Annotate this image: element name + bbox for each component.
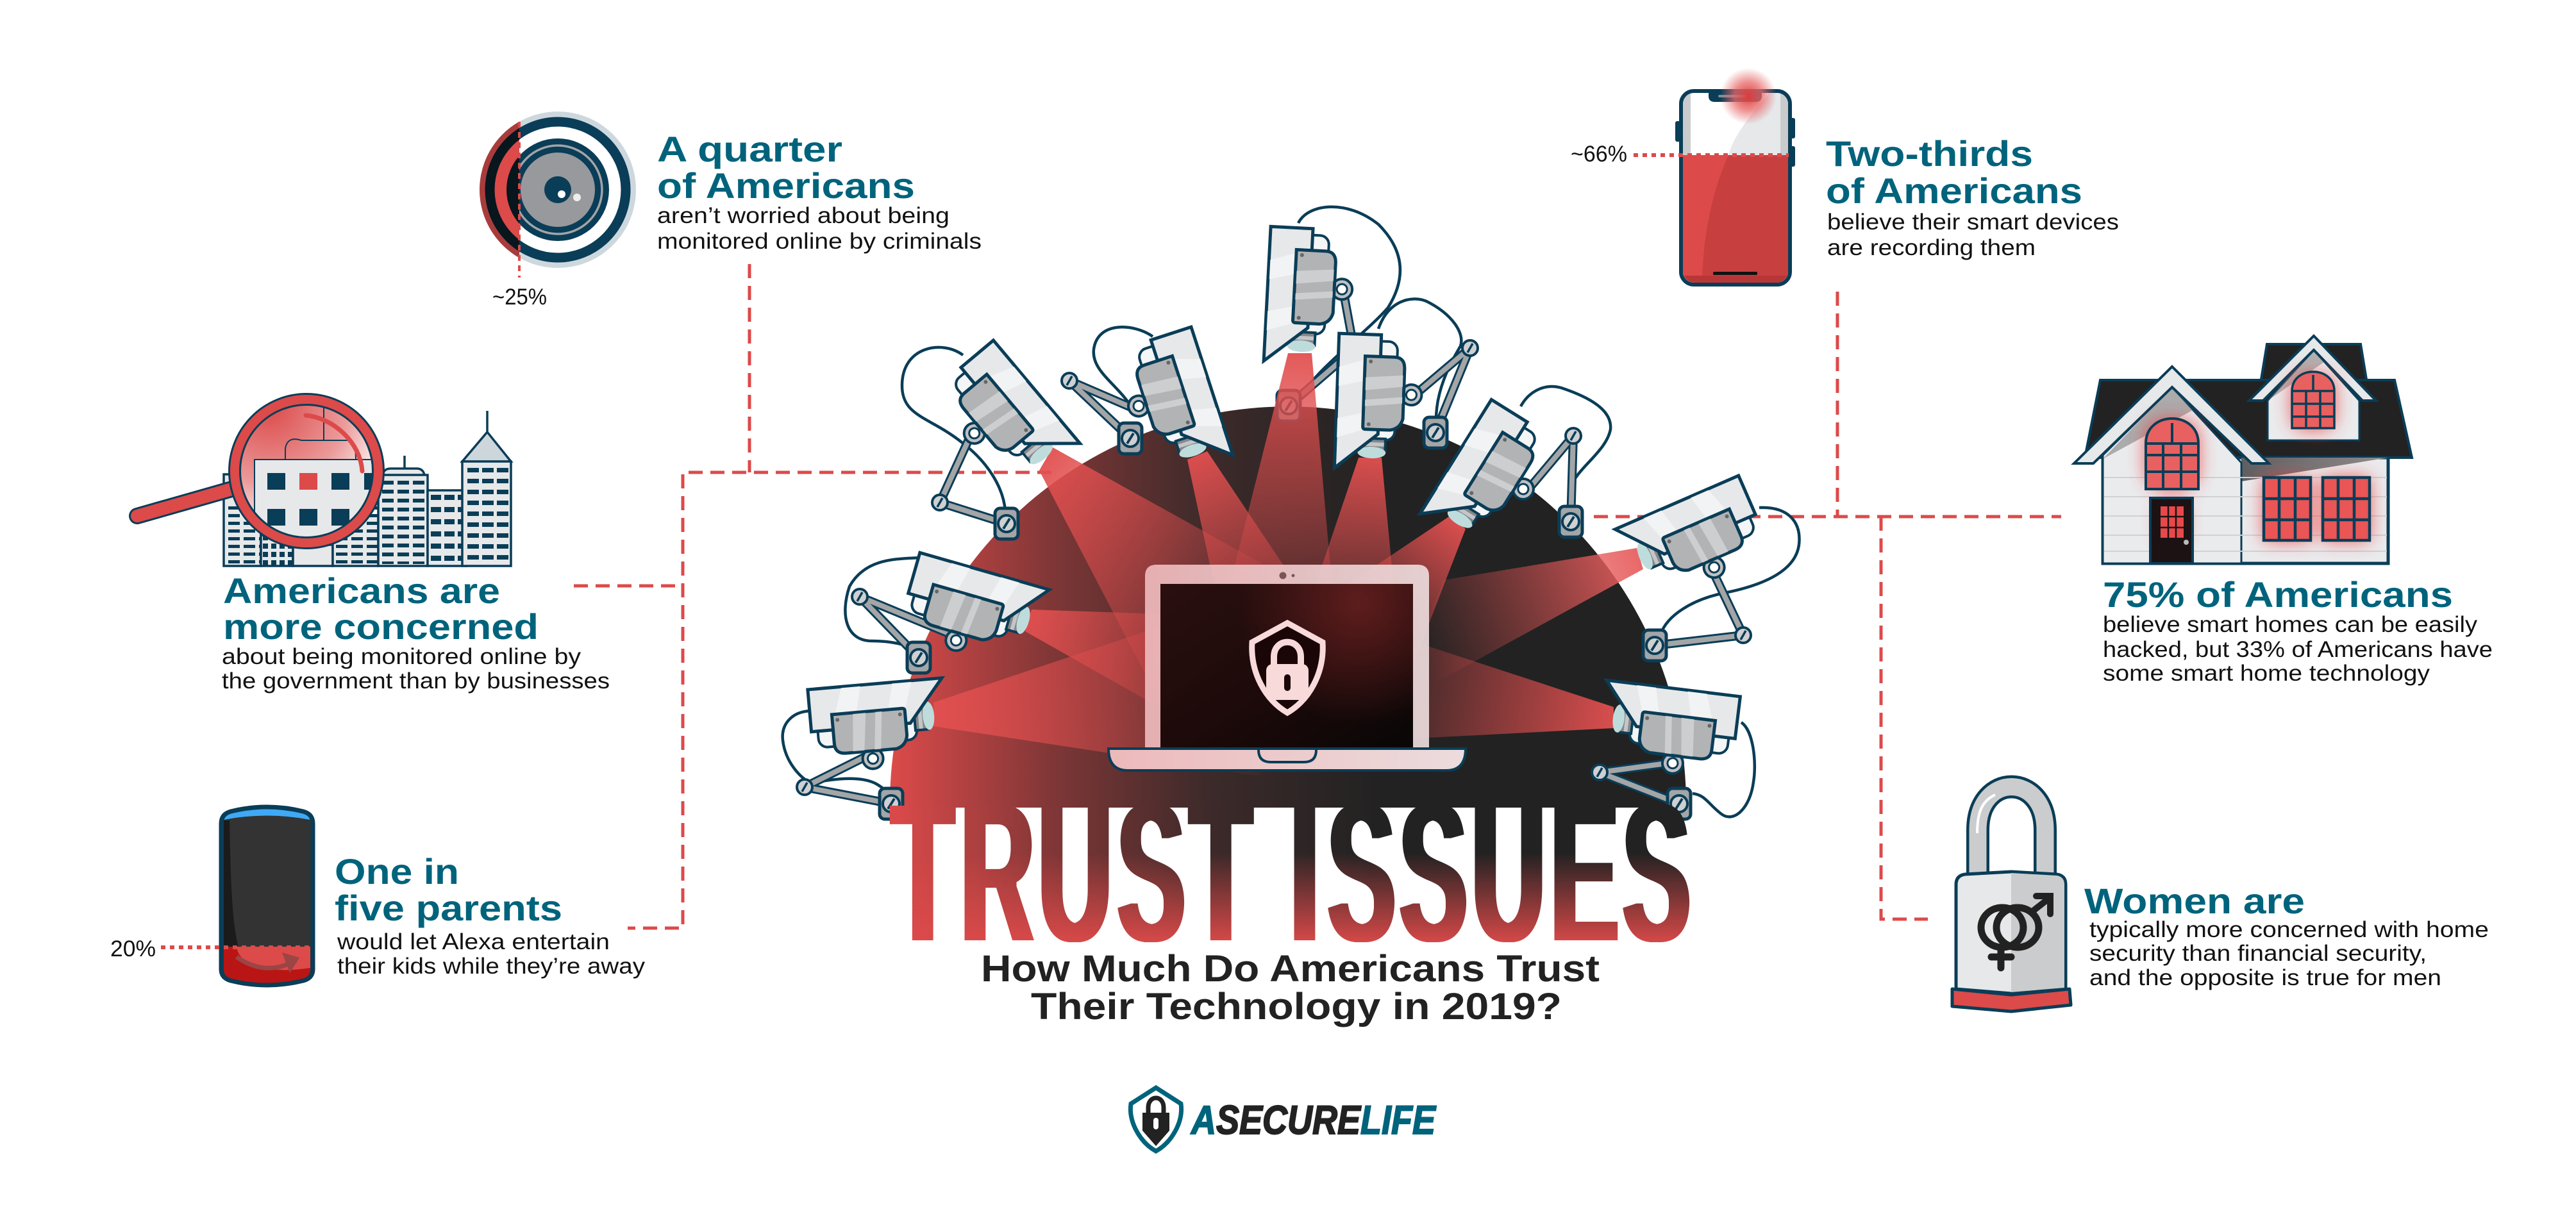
connector lines xyxy=(574,264,2061,928)
magnifier handle xyxy=(137,488,234,516)
icon: smartphone xyxy=(1634,68,1795,285)
camera 6 arm and wire xyxy=(1643,508,1799,661)
heading: 75% of Americans xyxy=(2103,574,2453,615)
dormer gable trim xyxy=(2249,336,2376,401)
main gable trim xyxy=(2074,367,2269,463)
heading: Two-thirds xyxy=(1826,133,2033,174)
dormer window xyxy=(2292,372,2334,428)
body text xyxy=(337,929,646,979)
body text: aren’t worried about being xyxy=(657,203,949,228)
magnifier ring xyxy=(235,399,378,543)
camera 7 xyxy=(1596,680,1740,781)
camera 5 xyxy=(1420,399,1563,559)
icon: padlock with gender symbols xyxy=(1952,787,2071,1011)
dormer roof xyxy=(2259,344,2368,391)
camera 7 arm and wire xyxy=(1592,722,1755,819)
subtitle xyxy=(981,948,1600,1027)
label: 66 percent: ~66% xyxy=(1571,142,1627,167)
city buildings xyxy=(224,411,511,566)
title: TRUST ISSUES xyxy=(892,760,1690,985)
body text xyxy=(2089,917,2489,990)
panel: women are xyxy=(1952,787,2489,1011)
heading: of Americans xyxy=(1826,170,2082,211)
right windows xyxy=(2264,478,2370,540)
body text xyxy=(222,644,610,694)
camera 9 arm and wire xyxy=(783,711,903,819)
panel: one in five parents xyxy=(110,807,646,985)
body text: hacked, but 33% of Americans have xyxy=(2103,637,2493,662)
body text: the government than by businesses xyxy=(222,669,610,694)
label: 20 percent: 20% xyxy=(110,936,156,961)
body text xyxy=(2103,612,2493,686)
camera light beams xyxy=(933,353,1643,776)
body text: typically more concerned with home xyxy=(2089,917,2489,942)
camera dots xyxy=(1280,572,1295,579)
panel: two-thirds of Americans xyxy=(1571,68,2119,285)
gable window xyxy=(2146,419,2198,489)
gender symbols xyxy=(1981,896,2050,968)
icon: smart speaker xyxy=(161,807,313,985)
camera 1 xyxy=(928,340,1080,498)
camera 6 xyxy=(1615,476,1772,607)
body text: are recording them xyxy=(1827,235,2036,260)
body text: believe smart homes can be easily xyxy=(2103,612,2478,637)
heading: One in xyxy=(335,851,459,892)
body text: about being monitored online by xyxy=(222,644,581,669)
camera arms and wires xyxy=(783,207,1799,819)
body text: monitored online by criminals xyxy=(657,229,982,254)
subtitle: Their Technology in 2019? xyxy=(1031,986,1562,1027)
laptop screen frame xyxy=(1145,565,1429,749)
panel: Americans are more concerned xyxy=(137,399,610,694)
icon: camera lens xyxy=(480,112,636,278)
heading xyxy=(335,851,562,928)
icon: house xyxy=(2074,336,2412,563)
body text: their kids while they’re away xyxy=(337,954,646,979)
heading: of Americans xyxy=(657,165,915,206)
lock base xyxy=(1952,989,2071,1011)
camera 8 arm and wire xyxy=(845,558,958,673)
body text: believe their smart devices xyxy=(1827,210,2119,235)
shackle xyxy=(1978,787,2045,875)
heading: A quarter xyxy=(657,129,842,169)
laptop notch xyxy=(1259,750,1316,762)
logo wordmark: ASECURELIFE xyxy=(1190,1098,1437,1143)
camera 4 xyxy=(1334,333,1424,471)
title lower red fade xyxy=(885,852,1693,945)
icon: shield with padlock xyxy=(1252,623,1323,713)
siding lines xyxy=(2104,478,2387,551)
camera 3 arm and wire xyxy=(1277,207,1400,421)
camera 9 xyxy=(808,678,949,774)
label: 25 percent: ~25% xyxy=(492,285,547,310)
logo xyxy=(1130,1088,1437,1151)
body text xyxy=(1827,210,2119,260)
subtitle: How Much Do Americans Trust xyxy=(981,948,1600,990)
camera 8 xyxy=(896,553,1050,671)
heading xyxy=(657,129,915,206)
camera 3 xyxy=(1264,226,1355,365)
body text: security than financial security, xyxy=(2089,941,2427,966)
window glows xyxy=(2146,375,2370,540)
icon: laptop xyxy=(1108,565,1466,770)
dormer wall xyxy=(2268,350,2359,440)
body text: some smart home technology xyxy=(2103,661,2430,686)
laptop screen xyxy=(1160,584,1413,749)
heading: Americans are xyxy=(223,570,500,611)
lock body xyxy=(1956,872,2066,993)
camera 5 arm and wire xyxy=(1521,386,1610,537)
camera 1 arm and wire xyxy=(902,347,1018,539)
panel: 75% of Americans xyxy=(2074,336,2493,686)
camera 2 arm and wire xyxy=(1062,327,1153,454)
panel: a quarter of Americans xyxy=(480,112,982,310)
icon: city skyline with magnifier xyxy=(137,399,511,566)
logo shield xyxy=(1130,1088,1182,1151)
body text: and the opposite is true for men xyxy=(2089,965,2441,990)
gable wall xyxy=(2103,387,2241,563)
heading xyxy=(223,570,539,647)
dome xyxy=(890,406,1686,808)
heading xyxy=(1826,133,2082,211)
camera 4 arm and wire xyxy=(1378,299,1478,448)
heading: five parents xyxy=(335,888,562,928)
main roof xyxy=(2085,380,2412,458)
security cameras xyxy=(808,226,1772,781)
body text xyxy=(657,203,982,254)
body text: would let Alexa entertain xyxy=(337,929,610,954)
door xyxy=(2150,498,2193,563)
main wall xyxy=(2103,458,2388,563)
camera 2 xyxy=(1110,327,1233,481)
magnified building xyxy=(241,406,372,536)
laptop base xyxy=(1108,749,1466,770)
heading: Women are xyxy=(2084,881,2305,921)
heading: more concerned xyxy=(223,606,539,647)
